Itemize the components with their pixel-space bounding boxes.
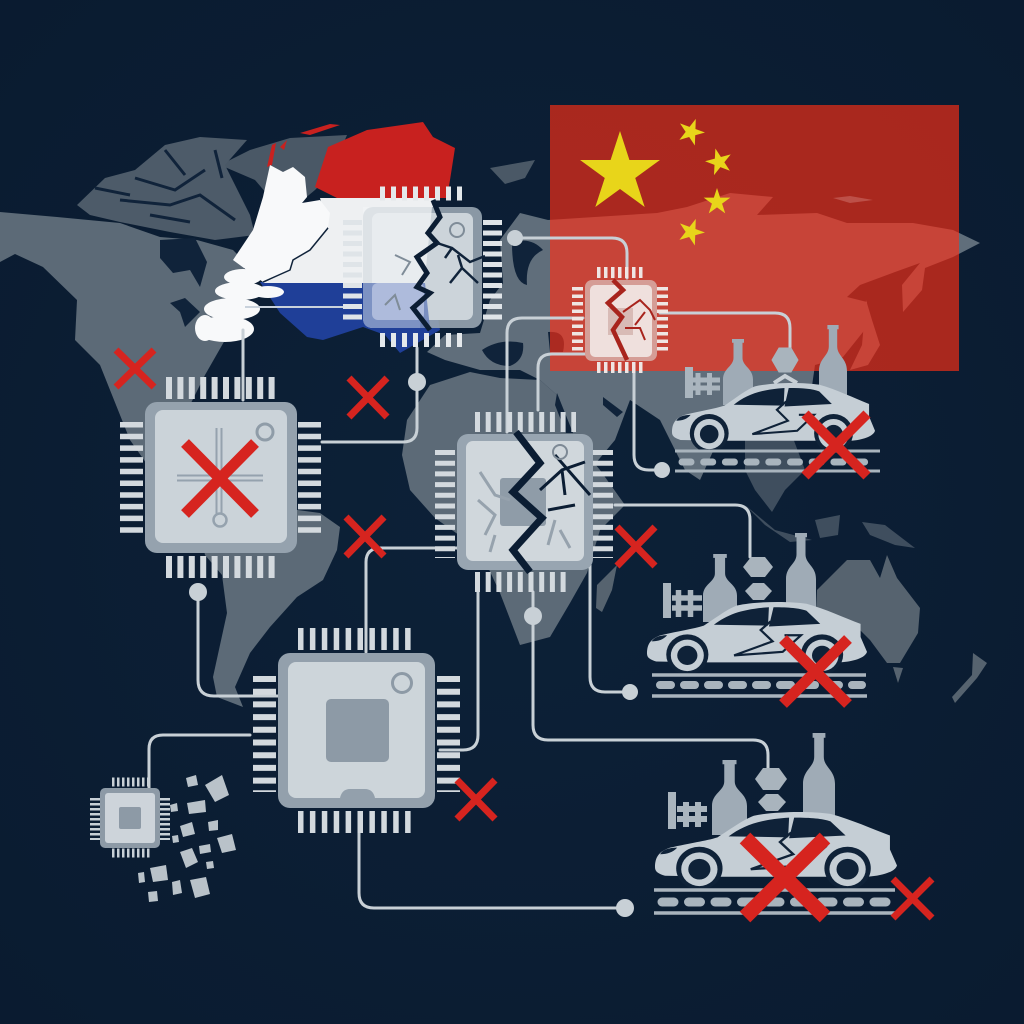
X car 3 xyxy=(745,838,825,917)
Tasmania xyxy=(893,667,903,683)
assembly line 2 xyxy=(647,533,867,696)
Canadian arctic islands xyxy=(77,137,255,240)
delta islands xyxy=(195,269,284,342)
robot rack xyxy=(668,792,676,829)
Indochina xyxy=(745,430,805,512)
Svalbard xyxy=(490,160,535,184)
South America xyxy=(200,505,340,707)
Africa xyxy=(402,372,625,645)
X under Netherlands xyxy=(349,378,387,417)
bottles xyxy=(712,760,747,835)
Great Lakes xyxy=(170,298,200,327)
robot rack xyxy=(663,583,671,618)
China flag xyxy=(550,105,959,371)
chip: left large with X xyxy=(132,388,310,567)
chip: central cracked xyxy=(445,422,603,582)
chip debris xyxy=(138,775,236,902)
red coastal arcs xyxy=(267,124,340,167)
robot rack xyxy=(685,367,693,398)
car xyxy=(647,602,867,675)
link to chip xyxy=(245,306,345,308)
X centre left xyxy=(346,517,384,556)
Greenland xyxy=(220,135,347,215)
Netherlands flag map xyxy=(195,122,455,353)
New Zealand xyxy=(952,653,987,703)
car xyxy=(672,383,875,453)
connector lines xyxy=(149,238,790,908)
small star 2 xyxy=(703,145,735,176)
small star 4 xyxy=(675,214,708,247)
flag field xyxy=(550,105,959,371)
gear link xyxy=(772,348,798,372)
Indonesia xyxy=(745,505,840,542)
red X marks xyxy=(116,350,932,918)
X car 2 xyxy=(783,639,848,704)
bottles xyxy=(723,339,753,405)
red band xyxy=(315,122,455,198)
gear link xyxy=(755,768,787,790)
X on left chip xyxy=(185,443,255,514)
Eurasia xyxy=(427,193,980,480)
white coastline xyxy=(233,165,330,282)
small star 3 xyxy=(704,188,730,213)
X right of central chip xyxy=(617,527,655,566)
chip: small bottom left xyxy=(95,782,165,853)
assembly line 3 xyxy=(654,733,897,913)
car xyxy=(655,812,897,890)
X car 1 xyxy=(805,414,867,476)
inland seas xyxy=(482,241,623,433)
X upper left xyxy=(116,350,154,387)
chip: Netherlands cracked xyxy=(352,194,492,340)
X beside bottom chip xyxy=(457,780,495,819)
assembly line 1 xyxy=(672,325,880,471)
Australia xyxy=(815,555,920,663)
Japan xyxy=(850,300,880,370)
world map xyxy=(0,135,987,707)
Madagascar xyxy=(596,565,617,612)
conveyor xyxy=(675,451,880,471)
conveyor xyxy=(652,675,867,696)
connector nodes xyxy=(189,230,670,917)
small star 1 xyxy=(675,114,708,147)
white band xyxy=(263,198,435,283)
bottles xyxy=(703,554,737,622)
chip: China small cracked xyxy=(578,272,662,368)
Hudson Bay xyxy=(160,238,207,287)
arctic channels xyxy=(95,150,235,222)
gear link xyxy=(743,557,773,577)
blue band xyxy=(260,282,440,353)
X bottom right xyxy=(893,879,932,918)
New Guinea xyxy=(862,522,915,548)
North America xyxy=(0,212,245,530)
large star xyxy=(580,131,660,207)
coast outline xyxy=(263,228,328,282)
chip: bottom centre large xyxy=(264,639,448,822)
conveyor xyxy=(654,890,895,913)
arctic islands on flag xyxy=(833,196,873,203)
